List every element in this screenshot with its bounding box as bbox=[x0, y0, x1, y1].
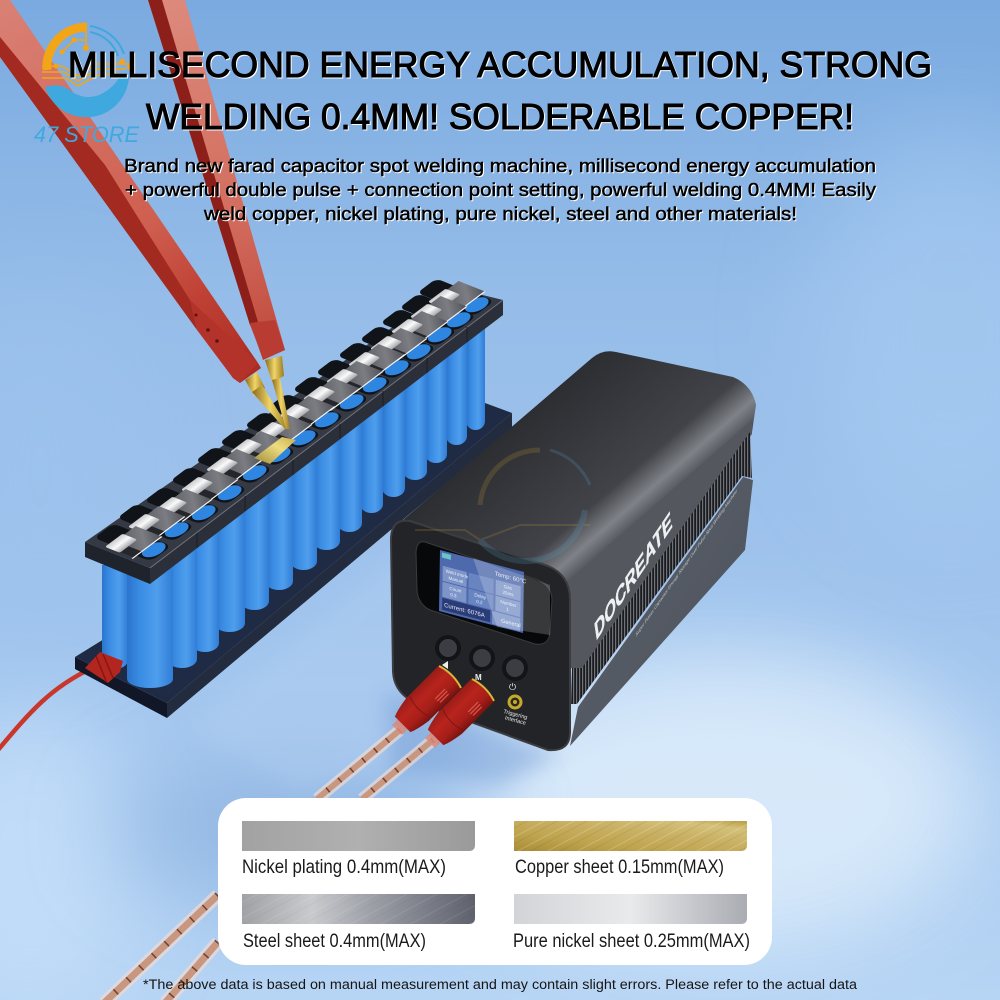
display interface: Number bbox=[500, 599, 517, 608]
red plug left bbox=[386, 664, 463, 741]
brand name: DOCREATE bbox=[593, 505, 673, 646]
trigger interface: Triggering bbox=[503, 709, 528, 721]
left welding pen bbox=[0, 0, 288, 429]
store logo watermark bbox=[34, 26, 139, 147]
right welding pen bbox=[148, 0, 290, 429]
display interface: Count bbox=[449, 586, 462, 594]
material thickness card bbox=[218, 798, 772, 965]
label: nickel plating: Nickel plating 0.4mm(MAX) bbox=[242, 857, 446, 878]
control buttons: M bbox=[475, 673, 482, 682]
control buttons bbox=[435, 635, 528, 692]
footnote: *The above data is based on manual measurement and may contain slight errors. Please refer to the actual data bbox=[143, 977, 858, 992]
battery cells bbox=[102, 323, 485, 688]
nickel strip across the cells bbox=[104, 280, 485, 559]
spot welding machine bbox=[391, 351, 756, 750]
label: pure nickel sheet: Pure nickel sheet 0.25mm(MAX) bbox=[513, 931, 750, 952]
display glass bbox=[416, 542, 552, 644]
device side lower panel bbox=[570, 477, 753, 746]
display interface: Gas bbox=[504, 584, 513, 591]
device side upper panel bbox=[558, 420, 752, 670]
display interface: Manual bbox=[449, 575, 463, 584]
title: WELDING 0.4MM! SOLDERABLE COPPER! bbox=[146, 96, 854, 137]
label: copper sheet: Copper sheet 0.15mm(MAX) bbox=[515, 857, 724, 878]
display interface: Current: 6076A bbox=[444, 602, 486, 620]
screen glare bbox=[473, 558, 550, 635]
display interface: General bbox=[501, 618, 521, 629]
subtitle: + powerful double pulse + connection point setting, powerful welding 0.4MM! Easily bbox=[125, 180, 876, 200]
display interface: 0.3 bbox=[450, 592, 457, 599]
subtitle: weld copper, nickel plating, pure nickel, steel and other materials! bbox=[203, 204, 797, 224]
swatch: copper sheet bbox=[514, 821, 747, 851]
copper cables bbox=[104, 730, 433, 1000]
title bbox=[68, 44, 932, 137]
display interface: Weld mode bbox=[446, 569, 469, 580]
battery holder frame bbox=[85, 287, 503, 584]
label: steel sheet: Steel sheet 0.4mm(MAX) bbox=[243, 931, 426, 952]
swatch: nickel plating bbox=[242, 821, 475, 851]
display interface: 1 bbox=[506, 607, 509, 612]
store logo watermark: 47 STORE bbox=[34, 122, 139, 147]
display interface: 25ms bbox=[503, 590, 514, 598]
red ground cable bbox=[0, 668, 92, 750]
logo reflection on device bbox=[415, 450, 590, 561]
battery slots with blue cell tops bbox=[93, 278, 495, 562]
trigger interface: Interface bbox=[504, 715, 526, 727]
title: MILLISECOND ENERGY ACCUMULATION, STRONG bbox=[68, 44, 932, 85]
display interface: 0.2 bbox=[476, 599, 483, 605]
display interface: Temp: 60°C bbox=[495, 570, 527, 586]
trigger interface bbox=[503, 694, 528, 727]
model line: Super Power Capacitor Energy Storage Dual Pulse Spot Welding Machine bbox=[636, 488, 737, 639]
device front face bbox=[391, 521, 570, 750]
red plug right bbox=[419, 677, 496, 754]
display interface bbox=[439, 550, 527, 634]
ground connector plug bbox=[85, 652, 123, 683]
subtitle bbox=[124, 156, 876, 224]
battery tray base plate bbox=[75, 403, 512, 718]
device top surface bbox=[403, 351, 756, 592]
device side vents bbox=[571, 432, 752, 704]
swatch: pure nickel sheet bbox=[514, 894, 747, 924]
subtitle: Brand new farad capacitor spot welding machine, millisecond energy accumulation bbox=[124, 156, 876, 176]
display interface: Delay bbox=[474, 592, 487, 600]
swatch: steel sheet bbox=[242, 894, 475, 924]
control buttons: ⏻ bbox=[509, 682, 516, 692]
